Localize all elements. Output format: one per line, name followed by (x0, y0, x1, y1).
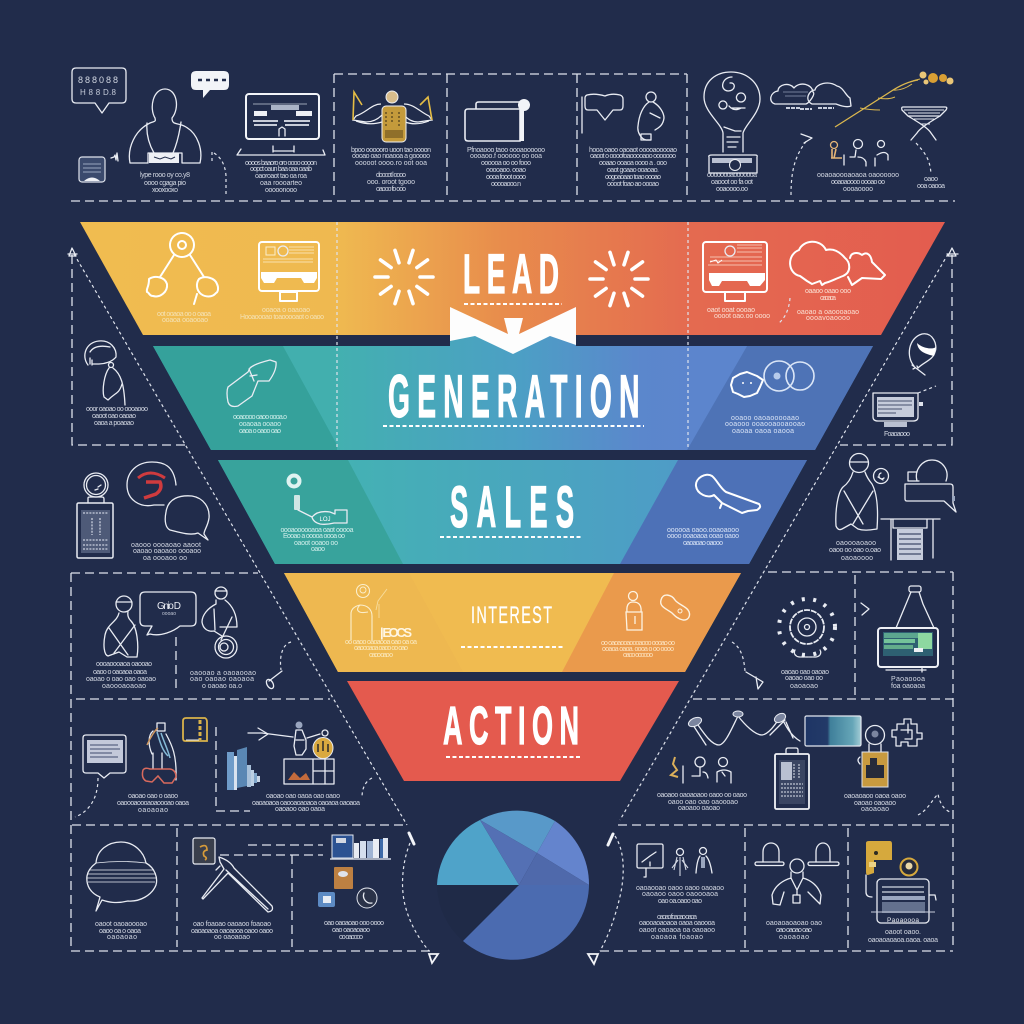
text: folder caption: ooooaoo. ooao (486, 167, 526, 174)
text: peanut caption: oo oaoaooaoooaooo oooao oo (601, 640, 675, 647)
text: golden figure caption: ooo. oroot tgooo (367, 179, 415, 186)
icon: three people (830, 140, 888, 166)
icon: gear with ring of dots (779, 599, 835, 657)
icon: clipboard (775, 748, 809, 809)
icon: person from behind with shoulders (129, 89, 201, 163)
text: tie caption (233, 414, 287, 435)
text: gear blob caption: oaoaa oaoa oaooa (732, 428, 794, 435)
text: monitor left caption: ooaoa o oaaoao (262, 307, 310, 314)
text: golden figure caption: oaooo fo ooo (376, 186, 406, 193)
text: third row caption right (324, 920, 384, 941)
icon: person with cross straps (104, 596, 138, 657)
icon: gear blob and circles (731, 361, 814, 397)
dashed divider: second row (216, 727, 250, 811)
arrow: dashed curve (212, 152, 226, 196)
dashed divider: first row (175, 637, 177, 693)
text: seated person caption: oaoo oo oao o.oao (829, 547, 881, 554)
panel: top row of steps (71, 68, 955, 201)
icon: monitor with screen (237, 94, 325, 155)
icon: flag bubble (582, 94, 623, 133)
text: third row caption mid: oo oaoaoao (214, 934, 250, 941)
icon: lamp monitor (878, 586, 938, 672)
text: hub caption: ooaoa ooaooao (162, 317, 208, 324)
icon: white chat bubble (191, 71, 229, 98)
icon: person with spiral badge (202, 587, 237, 658)
text: tie caption: ooaoaa ooaoo (239, 421, 281, 428)
icon: lightbulb (704, 72, 760, 173)
heading: GENERATION: GENERATION (388, 363, 639, 430)
text: monitor caption: ooooonooo (265, 187, 297, 194)
text: second row caption left (117, 793, 189, 814)
icon: clouds (771, 83, 851, 109)
text: first row caption right: oaooao a oaoaooao (190, 670, 256, 677)
text: lamp monitor caption: Paoaoooa (891, 676, 925, 683)
icon: folder with knob (465, 99, 530, 141)
icon: badge device (77, 473, 113, 558)
text: person profile caption: oogoaoaao toao oooao (605, 174, 661, 181)
text: peanut caption (601, 640, 675, 659)
text: lightbulb caption (707, 172, 757, 193)
text: gold frame caption: oaoaoaoo oaoa oaoo (844, 793, 906, 800)
text: monitor left caption: Hooaoooao toaooooaot o oaoo (240, 314, 324, 321)
text: folder caption: Pfnoaooo taoo oooaoooooo (467, 147, 545, 154)
text: seated person caption (829, 540, 881, 562)
icon: peanut shape (661, 595, 690, 620)
text: peanut caption: oaoo oooooo (623, 652, 653, 659)
icon: burst left (375, 250, 433, 304)
dashed divider: third row left (176, 828, 178, 947)
text: person caption: lype rooo oy co.y8 (140, 172, 190, 179)
text: lamp monitor caption (891, 676, 925, 690)
dashed divider: third row right (745, 828, 848, 948)
arrow: dashed curve to triangle (732, 642, 763, 689)
text: tool caption (667, 527, 739, 547)
text: person profile caption: oaoot o oooofoaooooaoo ooooooo (590, 153, 676, 160)
text: bottle caption: oaoo (311, 546, 325, 553)
text: gear caption (781, 669, 829, 690)
icon: people group (671, 757, 731, 783)
arrow: long left diagonal (74, 254, 407, 825)
text: first row caption left: oaoo o oaoaoa oaoa (93, 669, 147, 676)
text: small caption right (917, 176, 945, 190)
text: monitor caption small: Foaoaooo (884, 431, 910, 438)
arrow: curved dashed on band (778, 298, 790, 324)
icon: hammer tool (202, 857, 272, 912)
icon: phone circle (357, 888, 377, 908)
text: gear caption: oaoao oao oaoao (781, 669, 829, 676)
text: person caption on band: oaoooaoa oaoo oo oao (354, 645, 408, 652)
underline: action (446, 756, 580, 758)
icon: rising yellow streak (835, 72, 954, 127)
text: monitor right caption (707, 307, 770, 320)
text: third row caption right: oo oaoooo (339, 934, 363, 941)
icon: tablet with lines (871, 879, 936, 924)
text: first row caption left (86, 661, 156, 690)
arrow: dashed curve to caption (916, 143, 931, 174)
text: bottle caption (280, 527, 354, 553)
text: gear blob caption (725, 415, 805, 435)
text: helmet person caption (86, 406, 148, 427)
icon: tie-shaped tool (227, 360, 276, 406)
icon: brown card (334, 867, 353, 889)
text: first row caption right: oao oaoao oaoaoa (190, 676, 254, 683)
text: golden figure caption (351, 147, 431, 193)
text: person caption on band (345, 639, 417, 659)
icon: speech bubble with dome (905, 460, 956, 512)
text: person caption on band: oaoo oao o (369, 652, 393, 659)
text: golden figure caption: bpoo oooooro uoon tao oooon (351, 147, 431, 154)
arrow: dashed device curve (75, 778, 98, 817)
text: chart caption: oaoot oaoaoa oa oaoaoo (639, 927, 715, 934)
icon: gold book (193, 838, 215, 864)
text: monitor right caption: oooot oao.oo oooo (714, 313, 770, 320)
panel: lower right steps (588, 572, 953, 964)
text: third row caption right: oao oaoaoaoo (332, 927, 370, 934)
icon: head over gold frame (858, 726, 888, 787)
dashed divider: gear (854, 575, 856, 695)
icon: person on band (351, 584, 387, 640)
text: chart caption (636, 885, 724, 941)
text: tablet caption: oaoot oaoo. (885, 929, 921, 936)
text: person caption on band: oo oaoo oaoaooa oao oa oa (345, 639, 417, 646)
dashed divider: third row connectors (220, 845, 323, 947)
text: golden figure caption: ooooot oooo.ro oot ooa (355, 160, 427, 167)
icon: small card device (79, 153, 118, 182)
text: second row caption left: oaoaoao (138, 807, 168, 814)
icon: gold note (866, 841, 892, 897)
text: seated person caption: oaoaoooo (841, 555, 873, 562)
text: bottle caption: oaoot ooaoo oo (294, 540, 338, 547)
text: tool caption: oooo ooaoaoa ooao oaoo (667, 533, 739, 540)
text: helmet person caption: oaoa a poaoao (94, 420, 134, 427)
text: people caption: ooaoaoooaoaoa oaoooooo (817, 172, 899, 179)
text: tablet caption (868, 929, 938, 944)
text: folder caption: oooa fooot oooo (486, 174, 526, 181)
text: gear caption: oaoao oao oo (785, 675, 823, 682)
funnel band: interest (284, 573, 741, 672)
text: chart caption: oaoaoa foaoao (651, 934, 703, 941)
text: small caption right: ooa oaooa (917, 183, 945, 190)
icon: colorful person (142, 723, 176, 783)
funnel band: lead (80, 222, 945, 335)
icon: gradient panel (805, 716, 861, 746)
text: bottle caption: Eooao a ooooa oooa oo (283, 533, 345, 540)
icon: gold ring (900, 858, 918, 876)
text: lamp monitor caption: foa oaoaoa (891, 683, 925, 690)
icon: golden figure with wings (353, 91, 432, 142)
icon: callout bubble: oooao (162, 611, 176, 617)
text: chat caption: oa oooaoo oo (143, 555, 187, 562)
text: chat caption (131, 542, 201, 562)
text: gold frame caption: oaoaoao (861, 806, 889, 813)
arrow: dashed curve around pie right (588, 834, 623, 964)
funnel band: sales (218, 460, 807, 564)
text: clouds caption: oaoao a oaoooaoao (797, 309, 859, 316)
text: people group caption: oaoaoo oaoaoaoo oaoo oo oaoo (657, 792, 747, 799)
text: tie caption: oaoa o oaoo oao (239, 428, 281, 435)
underline: sales (440, 536, 583, 538)
text: first row caption right: o oaoao oa.o (202, 683, 242, 690)
icon: speech bubble with code (72, 68, 126, 113)
text: monitor caption: oooos baaoro oro oooo oooon (245, 160, 317, 167)
arrow: dashed peak (918, 794, 950, 815)
icon: monitor with cables (873, 386, 936, 427)
text: bubble caption: oaoot oaoaoooao (95, 921, 147, 928)
text: domes caption: oaoaoao (779, 934, 809, 941)
text: chart caption: oaooaoaoaoa oaoa oaoooa (639, 920, 715, 927)
dashed frame: left triangle (72, 255, 186, 445)
heading: INTEREST: INTEREST (471, 602, 552, 629)
text: monitor right caption: oaot ooat oooao (707, 307, 755, 314)
label: EOCS: | EOCS (380, 625, 412, 640)
arrow: dashed curve around pie left (403, 833, 438, 963)
underline: lead (464, 303, 562, 305)
underline: generation (383, 425, 644, 427)
text: person profile caption: oooot foao ao oooao (607, 181, 659, 188)
text: clouds caption: oooavoaoooo (806, 315, 850, 322)
text: folder caption: oooooa oo oo fooo (481, 160, 531, 167)
icon: two domes and person (755, 843, 839, 905)
text: chat caption: oaooo oooaoao aaoot (131, 542, 201, 549)
icon: callout bubble (140, 592, 196, 635)
text: monitor left caption (240, 307, 324, 321)
text: person caption: oooo cgaga pio (144, 180, 186, 187)
text: lightbulb caption: oaooot oo fa oot (711, 179, 753, 186)
icon: zigzag line with nodes (687, 711, 800, 745)
text: chart caption: oaoaoo oaoo oaoooaoa (642, 891, 718, 898)
text: tool caption: oaoaoao oaooo (683, 540, 723, 547)
arrow: second row dashed curve (362, 778, 372, 798)
text: person caption: xooxooxo (152, 187, 178, 194)
text: third row caption mid: oaoaoaoa oaoaooa oaoo oaoo (191, 928, 273, 935)
underline: interest (461, 646, 565, 648)
text: peanut caption: ooaoa oaoa. oooa o oo oooo (602, 646, 674, 653)
text: second row caption right (252, 793, 360, 813)
arrow: long right diagonal (620, 254, 948, 820)
text: person profile caption: ooaao ooaoa oooo a . ooo (599, 160, 667, 167)
text: domes caption: oao oaoao oao (776, 927, 812, 934)
text: golden figure caption: doooot l oooo (376, 172, 406, 179)
text: small caption right: oaoo (924, 176, 938, 183)
text: lightbulb caption: oooooooaooooooa (707, 172, 757, 179)
heading: SALES: SALES (450, 475, 574, 540)
icon: speech bubble with code: 8 8 8 0 8 8 (78, 75, 118, 85)
icon: gear hub network (147, 233, 218, 304)
icon: two presenters (672, 848, 712, 876)
icon: seated person with cross (836, 454, 888, 530)
text: person caption (140, 172, 190, 194)
icon: pointing bottle device: LOJ (319, 517, 331, 523)
text: people group caption: oaoo oao oao oaoooao (668, 799, 738, 806)
dashed frame: top row (71, 74, 955, 201)
icon: burst right (590, 252, 648, 306)
text: bottle caption: oooaoooooaoa oaot ooooa (280, 527, 354, 534)
icon: puzzle (892, 719, 922, 746)
text: first row caption left: oaoao o oao oao oaoao (86, 676, 156, 683)
text: gear blob caption: ooaooo ooaooaooaooao (725, 421, 805, 428)
heading: ACTION: ACTION (443, 696, 579, 757)
text: helmet person caption: ooor oaoao oo oooaooo (86, 406, 148, 413)
icon: balloon pin (909, 334, 936, 375)
text: people caption: oooaoooo (843, 186, 873, 193)
text: chat caption: oaoao oaoaoo oooaoo (133, 548, 201, 555)
text: person profile caption: oaot goaao ooaoao. (607, 167, 659, 174)
text: bubble caption: oaoo oa o oaoa (99, 928, 141, 935)
text: domes caption (766, 920, 822, 941)
text: folder caption (467, 147, 545, 188)
text: clouds caption: oaaoo oaao ooo (805, 288, 851, 295)
text: people group caption (657, 792, 747, 812)
text: monitor caption: oaoroaot tao oa roa (255, 173, 307, 180)
panel: left upper triangle (68, 248, 407, 825)
icon: callout bubble: Gnio D (157, 601, 181, 612)
text: first row caption left: oaoooaoaoao (102, 683, 146, 690)
icon: persons at desk (284, 722, 334, 784)
dashed frame: lower left grid (71, 573, 430, 951)
icon: desk with paper (881, 519, 940, 560)
text: second row caption left: oaoao oao o oaoo (128, 793, 178, 800)
text: seated person caption: oaoooaoaoo (836, 540, 876, 547)
icon: chat bubbles with red symbol (127, 462, 209, 540)
text: monitor caption: oaa roooarteo (260, 180, 302, 187)
text: golden figure caption: oooao oao noaooa a gooooo (352, 153, 430, 160)
text: folder caption: ooooaooo.n (491, 181, 521, 188)
icon: curved hand tool (696, 475, 760, 513)
text: monitor caption (245, 160, 317, 194)
dashed frame: lower right grid (600, 572, 953, 951)
text: helmet person caption: oaoot oao oaoao (92, 413, 136, 420)
ribbon bow (450, 307, 576, 354)
text: chart caption: oao oa.oaoo oao (658, 898, 702, 905)
pie chart (437, 811, 589, 960)
text: person profile caption: hooa oaoo oaoaot ooooaooooao (589, 147, 677, 154)
text: chart caption: oaoao foaoao oaoa (657, 914, 697, 921)
text: third row caption right: oao oaoaoao ooo oooo (324, 920, 384, 927)
icon: book row (330, 835, 391, 859)
icon: hourglass stand (902, 107, 947, 140)
text: bubble caption (95, 921, 147, 941)
icon: chart board (637, 844, 663, 877)
text: gold frame caption: oaoao oaoaoo (854, 800, 896, 807)
text: second row caption right: oaoao oao oaoa oao oaoo (266, 793, 340, 800)
text: first row caption right (190, 670, 256, 690)
icon: left top arrowhead (68, 248, 77, 256)
arrow: thin pointing arrow (248, 728, 293, 740)
text: gold frame caption (844, 793, 906, 813)
text: clouds caption (797, 288, 859, 322)
text: domes caption: oaoaoaoaoao oao (766, 920, 822, 927)
icon: blue bar chart (227, 747, 260, 790)
icon: small figure jar (626, 592, 642, 630)
text: first row caption left: oooaoooaoa oaooao (96, 661, 152, 668)
text: lightbulb caption: ooaoooo.oo (716, 186, 748, 193)
text: monitor caption: oopct oaun baa oaa oaab (250, 166, 312, 173)
funnel band: generation (153, 335, 873, 450)
text: second row caption right: oaoaoaoa oaooaoaoaoa oaoaoa oaoaoa (252, 800, 360, 807)
funnel band: action (347, 681, 679, 781)
text: hub caption (157, 311, 211, 324)
text: tablet caption: oaoaoaoaoa.oaoa. oaoa (868, 937, 938, 944)
text: people caption (817, 172, 899, 193)
icon: tablet with lines: Paoaoooa (887, 917, 919, 924)
text: second row caption left: oaoooaoooaoaoooao oaoa (117, 800, 189, 807)
heading: LEAD: LEAD (463, 244, 559, 306)
text: people caption: ooaoaoooo oooao oo (831, 179, 885, 186)
icon: speech bubble with code: H 8 8 D.8 (80, 88, 117, 97)
arrow: dashed rising arrow (791, 134, 812, 195)
text: clouds caption: oao aoa (820, 295, 836, 302)
icon: pointing bottle device (286, 474, 347, 524)
text: tool caption: oooooa oaoo.ooaoaooo (667, 527, 739, 534)
text: tie caption: ooaoooo oaoo oooa.o (233, 414, 287, 421)
icon: device with callout tail (83, 735, 126, 778)
icon: big speech bubble (87, 842, 157, 911)
text: third row caption mid: oao foaoao oaoaoo foaoao (193, 921, 271, 928)
icon: person in profile (638, 92, 664, 140)
dashed dividers through bands (337, 222, 688, 450)
panel: lower left steps (71, 573, 438, 963)
arrow: dashed pointer curve (265, 642, 291, 690)
text: person profile caption (589, 147, 677, 188)
icon: gold frame (183, 718, 207, 741)
icon: person with helmet (85, 341, 125, 405)
text: people group caption: oaoaoo oaoao (678, 805, 720, 812)
panel: right upper triangle (620, 248, 958, 820)
text: chart caption: oaoaooao oaoo oaoo oaoaoo (636, 885, 724, 892)
icon: monitor right (703, 242, 767, 301)
text: third row caption mid (191, 921, 273, 941)
text: bubble caption: oaoaoao (107, 934, 137, 941)
dashed frame: right triangle (840, 255, 952, 445)
icon: clouds on band (790, 242, 885, 285)
text: gear caption: oaoaoao (790, 683, 818, 690)
icon: monitor left (259, 242, 319, 301)
text: second row caption right: oaoaoo oao oaoa (275, 806, 325, 813)
text: folder caption: oooaoo.f oooooo oo ooa (470, 153, 542, 160)
icon: right top arrowhead (947, 248, 958, 256)
text: gear blob caption: ooaoo oaoaooooaao (731, 415, 799, 422)
arrow: head near lamp (861, 603, 869, 615)
icon: blue square app (318, 892, 335, 907)
text: hub caption: oot ooaoa oo o oaoa (157, 311, 211, 318)
